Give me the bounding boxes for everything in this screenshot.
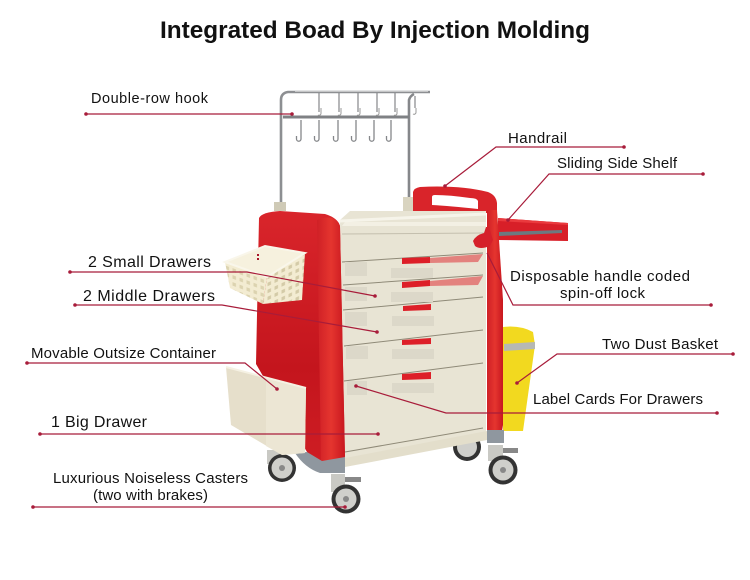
callout: label cards for drawers: Label Cards For Drawers: [533, 391, 703, 408]
right red column: [487, 210, 503, 431]
callout: luxurious noiseless casters: [31, 470, 347, 509]
product: medical trolley: [225, 92, 568, 514]
dust basket: [503, 327, 535, 431]
callout: luxurious noiseless casters: (two with brakes): [93, 487, 208, 504]
back casters: [453, 433, 481, 461]
callout: luxurious noiseless casters: Luxurious Noiseless Casters: [53, 470, 248, 487]
drawer labels: [402, 254, 483, 380]
callout: movable outsize container: Movable Outsize Container: [31, 345, 216, 362]
callout: disposable handle coded spin-off lock: spin-off lock: [560, 285, 646, 302]
callout: label cards for drawers: [354, 384, 719, 415]
callout: handrail: Handrail: [508, 130, 567, 147]
sliding side shelf: [498, 218, 568, 241]
callout: disposable handle coded spin-off lock: [487, 253, 713, 307]
callout: double-row hook: Double-row hook: [91, 91, 209, 107]
callout: two dust basket: [515, 336, 735, 385]
casters: [267, 445, 518, 514]
spin-off lock: [473, 227, 493, 248]
callout: 1 big drawer: [38, 414, 380, 436]
callout: 2 middle drawers: 2 Middle Drawers: [83, 288, 215, 305]
callout: two dust basket: Two Dust Basket: [602, 336, 719, 353]
left red side panel: [256, 211, 345, 472]
left red front column: [317, 218, 345, 470]
grey base: [295, 430, 504, 473]
handrail: [413, 187, 497, 225]
hook rail: [274, 92, 430, 211]
callout: movable outsize container: [25, 345, 279, 391]
callout: 2 middle drawers: [73, 288, 379, 334]
callout: disposable handle coded spin-off lock: Disposable handle coded: [510, 268, 690, 285]
callout: 1 big drawer: 1 Big Drawer: [51, 414, 148, 431]
callout: sliding side shelf: Sliding Side Shelf: [557, 155, 678, 172]
callout: handrail: [443, 130, 626, 188]
trolley body: [340, 211, 486, 466]
callout: 2 small drawers: [68, 254, 377, 298]
callout: double-row hook: [84, 91, 294, 116]
wire basket: [225, 246, 305, 304]
title: Integrated Boad By Injection Molding: [160, 17, 590, 44]
callout: 2 small drawers: 2 Small Drawers: [88, 254, 211, 271]
callout: sliding side shelf: [506, 155, 705, 222]
outsize container: [226, 367, 306, 455]
